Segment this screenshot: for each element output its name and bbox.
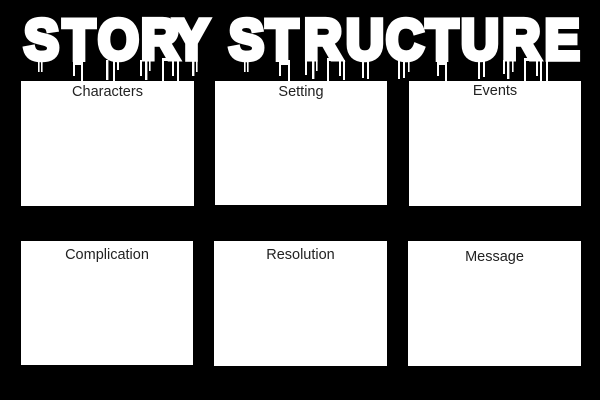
panel: resolution [214,241,387,366]
title word: story: STORY [24,7,209,71]
panel: resolution: Resolution [266,247,335,263]
panel: events: Events [473,83,517,99]
panel: setting: Setting [278,84,324,100]
panel: characters: Characters [72,84,143,100]
panel: setting [215,81,387,205]
title with dripping letters [22,7,580,81]
title word: structure: STRUCTURE [229,7,580,71]
panel: characters [21,81,194,206]
paint drips [38,58,548,82]
panel: message [408,241,581,366]
panel: complication [21,241,193,365]
panel: complication: Complication [65,247,149,263]
panel: events [409,81,581,206]
panel: message: Message [465,249,524,265]
